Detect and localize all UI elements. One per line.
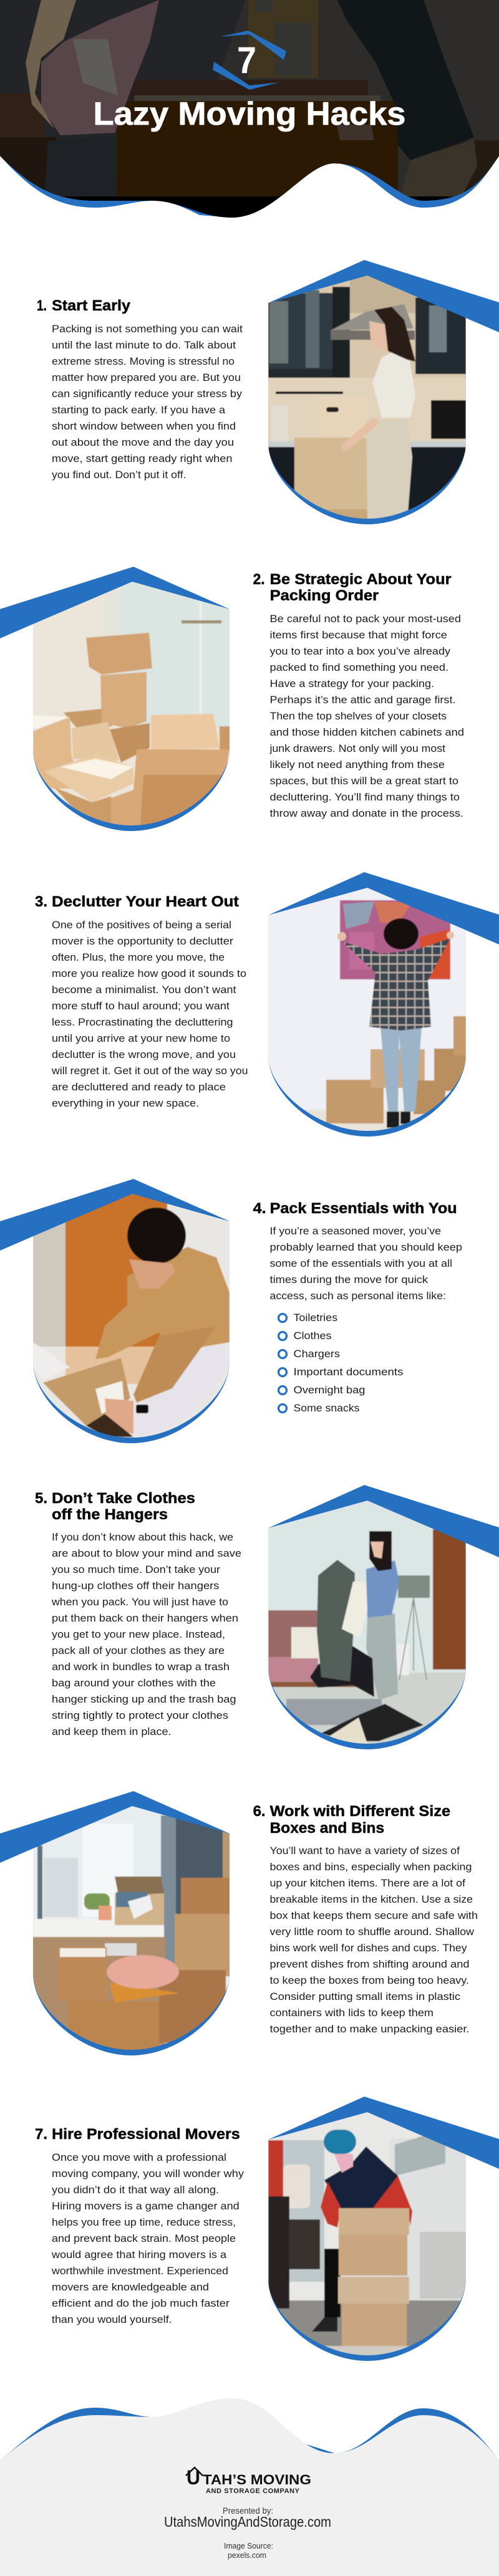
heading 5: Don’t Take Clothes xyxy=(52,1490,195,1507)
body text 1: matter how prepared you are. But you xyxy=(52,372,241,383)
heading 5 xyxy=(35,1490,195,1523)
body text 1: you find out. Don’t put it off. xyxy=(52,469,186,481)
body text 1: short window between when you find xyxy=(52,421,236,432)
heading 2 xyxy=(253,571,452,604)
body text 2: spaces, but this will be a great start to xyxy=(269,776,458,787)
image source value: pexels.com xyxy=(228,2550,266,2560)
website: UtahsMovingAndStorage.com xyxy=(164,2514,331,2530)
body text 6: prevent dishes from shifting around and xyxy=(269,1959,469,1970)
heading 2: 2. xyxy=(253,571,265,588)
photo 2: stacked cardboard boxes xyxy=(31,580,232,832)
body text 5: put them back on their hangers when xyxy=(52,1613,238,1624)
body text 4: access, such as personal items like: xyxy=(269,1290,446,1302)
logo roof xyxy=(186,2468,203,2476)
photo 4: woman labelling box xyxy=(31,1191,232,1443)
body text 7: moving company, you will wonder why xyxy=(52,2168,245,2180)
body text 7: would agree that hiring movers is a xyxy=(51,2249,227,2261)
heading 6 xyxy=(253,1803,450,1837)
heading 4: Pack Essentials with You xyxy=(270,1200,457,1217)
body text 5: bag around your clothes with the xyxy=(52,1678,216,1689)
heading 7: 7. xyxy=(35,2126,47,2143)
blue roof shield 2 xyxy=(0,567,230,831)
body text 3: are decluttered and ready to place xyxy=(52,1082,226,1093)
photo 7: mover stacking boxes by van xyxy=(265,2107,471,2365)
body text 6: You’ll want to have a variety of sizes of xyxy=(269,1845,460,1857)
body text 7 xyxy=(51,2152,245,2325)
bullet: Clothes xyxy=(278,1330,332,1342)
body text 2: likely not need anything from these xyxy=(269,759,445,771)
body text 2: Be careful not to pack your most-used xyxy=(269,613,461,625)
section 5: Don't Take Clothes xyxy=(35,1485,499,1752)
body text 5: are about to blow your mind and save xyxy=(52,1548,241,1559)
bullet: Overnight bag: Overnight bag xyxy=(293,1385,366,1396)
body text 1 xyxy=(52,324,243,481)
body text 1: until the last minute to do. Talk about xyxy=(52,340,236,351)
hero wave: blue edge xyxy=(0,156,499,218)
hero photo: couple with moving box xyxy=(0,0,499,224)
heading 1: 1. xyxy=(37,297,47,314)
body text 2: Have a strategy for your packing. xyxy=(269,678,434,690)
bullet: Toiletries: Toiletries xyxy=(293,1312,337,1324)
body text 3: declutter is the wrong move, and you xyxy=(52,1049,236,1060)
logo xyxy=(186,2466,311,2495)
body text 2 xyxy=(269,613,464,819)
heading 2: Packing Order xyxy=(270,587,379,604)
body text 2: decluttering. You’ll find many things to xyxy=(269,792,460,803)
heading 7: Hire Professional Movers xyxy=(52,2126,240,2143)
body text 7: Hiring movers is a game changer and xyxy=(52,2201,240,2212)
logo: TAH’S MOVING xyxy=(203,2472,311,2487)
body text 5: when you pack. You will just have to xyxy=(51,1597,228,1608)
bullet: Clothes: Clothes xyxy=(293,1330,332,1342)
body text 3: One of the positives of being a serial xyxy=(52,920,231,931)
body text 1: Packing is not something you can wait xyxy=(52,324,243,335)
body text 3: everything in your new space. xyxy=(52,1098,199,1109)
bullet: Toiletries xyxy=(278,1312,337,1324)
section 6: Different Size Boxes xyxy=(0,1791,478,2062)
body text 7: efficient and do the job much faster xyxy=(52,2298,230,2309)
body text 3: will regret it. Get it out of the way so you xyxy=(51,1065,248,1077)
body text 6: very little room to shuffle around. Shallow xyxy=(269,1926,474,1938)
body text 2: junk drawers. Not only will you most xyxy=(269,743,445,754)
body text 3: mover is the opportunity to declutter xyxy=(52,936,234,947)
body text 6: bins work well for dishes and cups. They xyxy=(269,1943,467,1954)
body text 7: than you would yourself. xyxy=(52,2314,172,2325)
body text 2: Then the top shelves of your closets xyxy=(269,711,447,722)
footer wave: blue edge xyxy=(0,2408,499,2461)
body text 5 xyxy=(51,1532,241,1737)
heading 2: Be Strategic About Your xyxy=(270,571,452,588)
body text 1: out about the move and the day you xyxy=(52,437,234,448)
body text 3: more stuff to haul around; you want xyxy=(52,1001,230,1012)
photo 5: woman holding clothes on hanger xyxy=(265,1496,471,1752)
body text 6: Consider putting small items in plastic xyxy=(269,1991,460,2002)
section 4: Pack Essentials xyxy=(0,1179,462,1443)
body text 6: together and to make unpacking easier. xyxy=(269,2024,469,2035)
body text 5: hung-up clothes off their hangers xyxy=(52,1580,220,1592)
section 1: Start Early xyxy=(37,260,499,527)
body text 1: move, start getting ready right when xyxy=(52,453,232,464)
body text 5: pack all of your clothes as they are xyxy=(52,1645,225,1656)
body text 6: breakable items in the kitchen. Use a size xyxy=(269,1894,473,1905)
body text 6: box that keeps them secure and safe with xyxy=(269,1910,478,1921)
body text 6: up your kitchen items. There are a lot of xyxy=(269,1878,465,1889)
logo: U xyxy=(187,2466,200,2489)
blue roof shield 1 xyxy=(268,260,499,524)
photo 3: person hanging painting xyxy=(265,885,471,1141)
blue roof shield 5 xyxy=(268,1485,499,1749)
body text 2: items first because that might force xyxy=(269,630,447,641)
bullet: Chargers: Chargers xyxy=(293,1348,340,1360)
body text 4 xyxy=(269,1226,462,1302)
bullet: Important documents: Important documents xyxy=(293,1367,403,1378)
blue roof shield 6 xyxy=(0,1791,230,2055)
section 3: Declutter xyxy=(35,872,499,1141)
photo 1: woman with boxes in kitchen xyxy=(265,271,471,527)
body text 5: hanger sticking up and the trash bag xyxy=(52,1694,236,1705)
bullet: Chargers xyxy=(278,1348,340,1360)
body text 5: you get to your new place. Instead, xyxy=(52,1629,225,1640)
body text 5: and keep them in place. xyxy=(52,1726,171,1737)
heading 4: 4. xyxy=(253,1200,266,1217)
hero number: 7 xyxy=(237,39,256,81)
body text 3: less. Procrastinating the decluttering xyxy=(52,1017,233,1028)
body text 1: extreme stress. Moving is stressful no xyxy=(52,356,235,367)
hero title: Lazy Moving Hacks xyxy=(94,96,405,132)
body text 3: until you arrive at your new home to xyxy=(52,1033,230,1044)
body text 6: boxes and bins, especially when packing xyxy=(269,1862,472,1873)
section 7: Hire Professional Movers xyxy=(35,2097,499,2365)
logo: AND STORAGE COMPANY xyxy=(206,2487,300,2495)
body text 3: become a minimalist. You don’t want xyxy=(52,984,236,996)
bullet: Some snacks: Some snacks xyxy=(293,1403,359,1414)
body text 3: more you realize how good it sounds to xyxy=(52,968,246,979)
footer panel xyxy=(0,2398,499,2576)
body text 1: starting to pack early. If you have a xyxy=(52,405,226,416)
body text 1: can significantly reduce your stress by xyxy=(52,388,243,400)
heading 1: Start Early xyxy=(52,297,131,314)
body text 4: some of the essentials with you at all xyxy=(269,1258,452,1269)
body text 5: you so much time. Don’t take your xyxy=(52,1564,221,1575)
body text 2: and those hidden kitchen cabinets and xyxy=(269,727,464,738)
heading 6: Work with Different Size xyxy=(270,1803,450,1820)
photo 6: boxes by window xyxy=(31,1802,232,2062)
presented by: Presented by: xyxy=(223,2506,273,2516)
body text 7: Once you move with a professional xyxy=(52,2152,226,2163)
body text 4: If you’re a seasoned mover, you’ve xyxy=(269,1226,441,1237)
body text 2: Perhaps it’s the attic and garage first. xyxy=(269,694,455,706)
body text 3 xyxy=(51,920,248,1109)
heading 5: 5. xyxy=(35,1490,47,1507)
body text 4: times during the move for quick xyxy=(269,1274,429,1286)
body text 5: If you don’t know about this hack, we xyxy=(52,1532,233,1543)
heading 6: Boxes and Bins xyxy=(270,1820,384,1837)
body text 7: and prevent back strain. Most people xyxy=(52,2233,236,2244)
body text 4: probably learned that you should keep xyxy=(269,1242,462,1253)
body text 7: movers are knowledgeable and xyxy=(52,2282,209,2293)
heading 5: off the Hangers xyxy=(52,1506,168,1523)
body text 6: containers with lids to keep them xyxy=(269,2007,434,2019)
heading 6: 6. xyxy=(253,1803,266,1820)
body text 7: helps you free up time, reduce stress, xyxy=(52,2217,236,2228)
body text 2: you to tear into a box you’ve already xyxy=(269,646,451,657)
bullet list xyxy=(278,1312,403,1414)
body text 2: packed to find something you need. xyxy=(269,662,448,673)
heading 3: Declutter Your Heart Out xyxy=(52,893,239,910)
body text 5: string tightly to protect your clothes xyxy=(52,1710,228,1721)
body text 7: worthwhile investment. Experienced xyxy=(51,2266,228,2277)
body text 3: often. Plus, the more you move, the xyxy=(52,952,225,963)
blue roof shield 4 xyxy=(0,1179,230,1443)
body text 5: and work in bundles to wrap a trash xyxy=(52,1661,230,1673)
blue roof shield 7 xyxy=(268,2097,499,2361)
heading 3: 3. xyxy=(35,893,47,910)
body text 6: to keep the boxes from being too heavy. xyxy=(269,1975,469,1986)
body text 7: you didn’t do it that way all along. xyxy=(52,2184,219,2196)
footer background xyxy=(0,2398,499,2576)
body text 2: throw away and donate in the process. xyxy=(269,808,463,819)
hero banner xyxy=(0,0,499,224)
section 2: Be Strategic xyxy=(0,567,464,832)
body text 6 xyxy=(269,1845,478,2035)
image source label: Image Source: xyxy=(224,2541,273,2550)
hero hexagon accent xyxy=(213,31,286,90)
blue roof shield 3 xyxy=(268,872,499,1137)
